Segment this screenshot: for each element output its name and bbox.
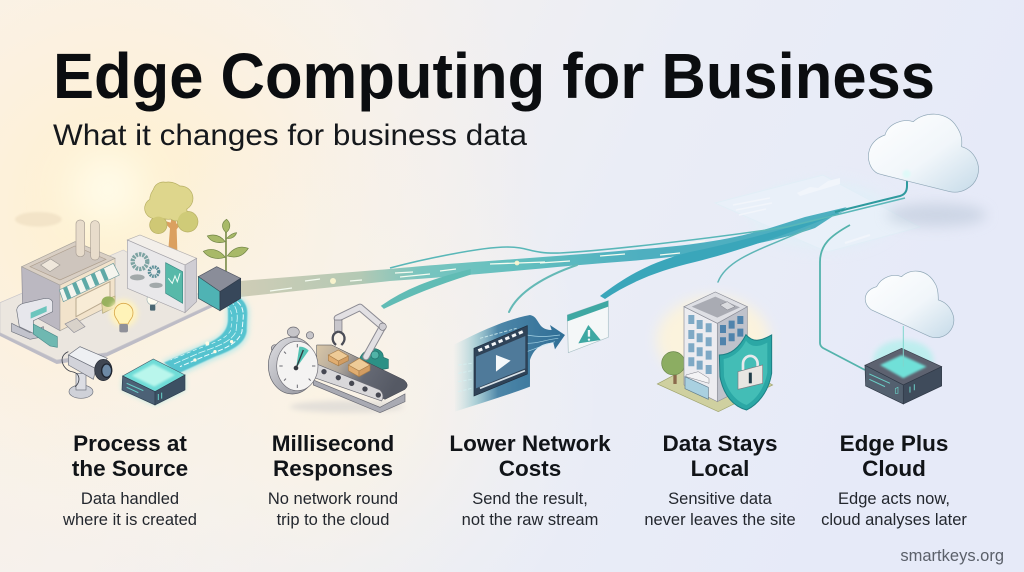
column 5: edge plus cloud: Edge Plus [840,431,948,456]
column 4: data stays local: Local [691,456,749,481]
main stream from the factory [240,207,847,297]
stopwatch [291,335,297,342]
column 4: data stays local: Sensitive data [668,490,773,508]
column 5: edge plus cloud: cloud analyses later [821,511,967,529]
column 4: data stays local [644,431,796,529]
display panel [127,235,197,265]
watermark: smartkeys.org [900,547,1004,565]
lower right tapered branch [600,210,847,299]
robot arm [337,307,383,357]
alert window [567,301,608,353]
faint dashboard hologram near cloud [715,175,920,252]
icon: video stream compressed to alert [453,301,608,412]
glowing flow to edge box [162,293,249,376]
conveyor belt [317,345,407,399]
trunk to cloud [835,172,907,212]
machine [12,323,43,339]
warm glow [657,297,770,383]
title: Edge Computing for Business [53,40,935,112]
building [684,307,717,402]
factory [22,267,60,331]
camera [69,385,93,398]
tree [162,212,184,250]
branch: milliseconds [382,270,470,308]
column 3: lower network costs [449,431,611,529]
stream body [453,315,565,412]
column 1: process at the source: Process at [73,431,187,456]
boxes [328,350,370,377]
thin upper line to the junction [390,198,905,268]
play symbol [496,355,511,372]
column 5: edge plus cloud: Edge acts now, [838,490,950,508]
gripper [335,320,342,332]
glow [873,340,933,380]
column 3: lower network costs: Costs [499,456,561,481]
server box [865,348,942,385]
icon: building with shield [657,292,773,412]
edge box [122,375,185,405]
soft shadow [290,401,403,413]
shield [719,335,772,410]
subtitle: What it changes for business data [53,119,527,152]
conveyor base [313,380,405,413]
column 4: data stays local: Data Stays [662,431,778,456]
edge gateway [198,267,241,292]
small cloud [865,271,954,338]
tree [673,370,677,384]
column 1: process at the source: where it is created [62,511,197,529]
icon: factory scene [0,182,249,405]
large bulb [110,299,138,327]
column 5: edge plus cloud [821,431,967,529]
branch: edge plus cloud [820,225,865,370]
branch: data stays local [718,228,810,282]
column 1: process at the source [62,431,197,529]
column 1: process at the source: the Source [72,456,188,481]
icon: large cloud [868,114,987,227]
robot base [358,349,388,371]
uplink beam [902,326,905,367]
column 4: data stays local: never leaves the site [644,511,796,529]
column 1: process at the source: Data handled [81,490,179,508]
faint cloud smudge [15,212,62,227]
column 5: edge plus cloud: Cloud [862,456,926,481]
lawn [657,353,773,412]
icon: stopwatch and robotic conveyor [268,307,407,413]
column 2: millisecond responses: No network round [268,490,398,508]
column 3: lower network costs: not the raw stream [462,511,598,529]
data streams to the cloud [240,172,907,370]
column 3: lower network costs: Lower Network [449,431,611,456]
column 2: millisecond responses [268,431,398,529]
ground [0,253,213,364]
column 3: lower network costs: Send the result, [472,490,588,508]
column 2: millisecond responses: trip to the cloud [277,511,389,529]
film frame [474,326,527,396]
bright packets [270,241,705,291]
column 2: millisecond responses: Millisecond [272,431,394,456]
plant [223,227,228,272]
padlock [743,356,758,370]
branch: network costs [509,265,577,312]
column 2: millisecond responses: Responses [273,456,393,481]
small bulb [147,294,158,305]
icon: edge server with small cloud [865,271,954,404]
conveyor side rail [313,363,383,401]
